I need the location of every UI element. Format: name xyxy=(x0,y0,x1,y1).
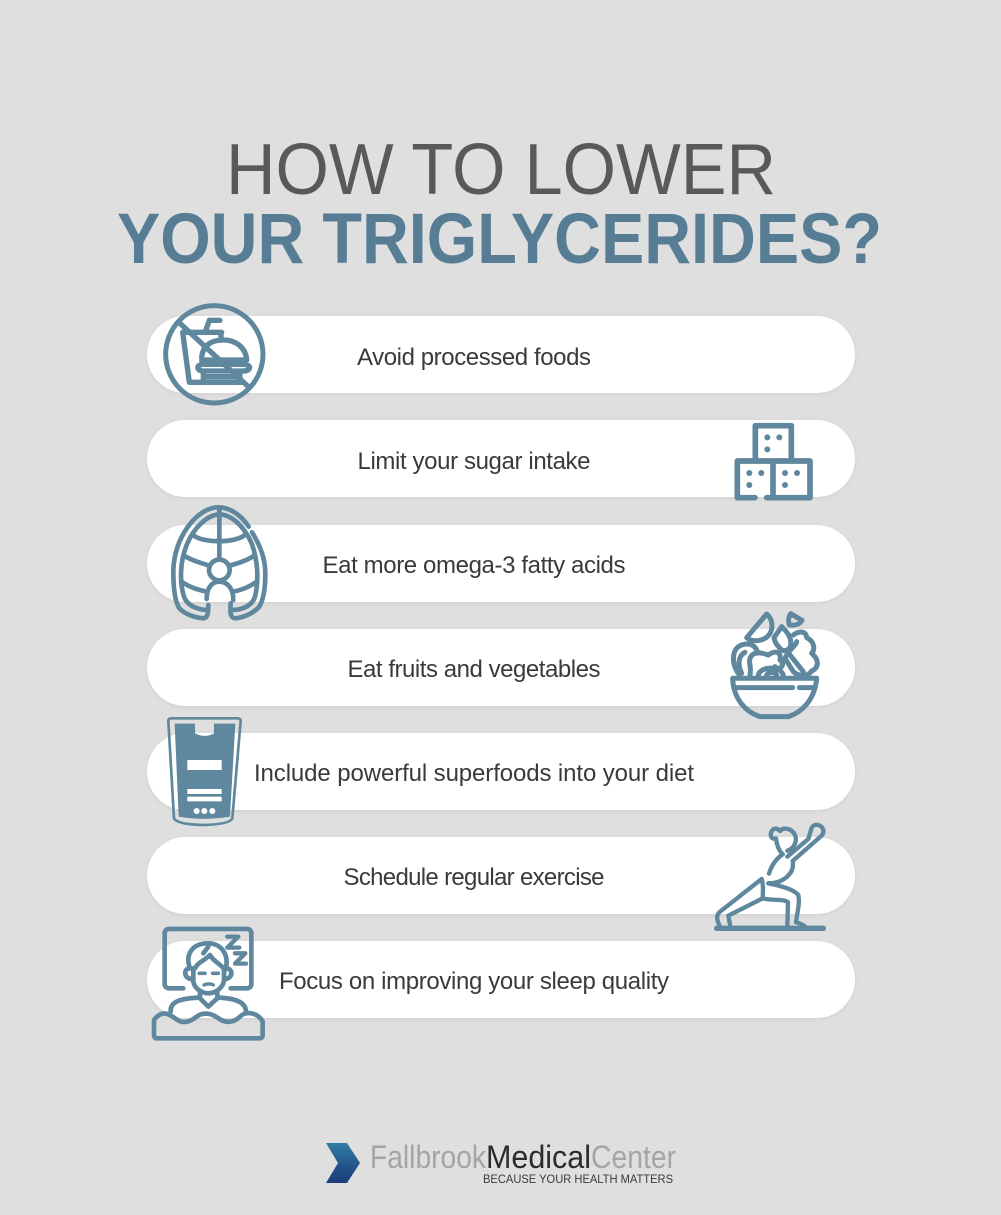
icon: salmon steak xyxy=(173,507,265,618)
icon: superfood pouch xyxy=(168,718,241,825)
panel: limit sugar xyxy=(147,420,855,497)
logo: Fallbrook Medical Center: Fallbrook xyxy=(370,1139,487,1175)
icon: logo chevron xyxy=(326,1143,360,1183)
panel: avoid processed foods: Avoid processed foods xyxy=(357,344,591,371)
panel: sleep xyxy=(147,941,855,1018)
logo: Fallbrook Medical Center: Center xyxy=(591,1139,676,1175)
logo: Fallbrook Medical Center: Medical xyxy=(486,1139,591,1175)
icon: sleeping person xyxy=(154,929,263,1038)
icon: exercise lunge pose xyxy=(717,825,823,928)
panel: exercise: Schedule regular exercise xyxy=(344,864,604,891)
logo: Fallbrook Medical Center xyxy=(326,1139,676,1186)
panel: sleep: Focus on improving your sleep quality xyxy=(279,968,669,995)
panel: fruits and vegetables: Eat fruits and vegetables xyxy=(348,656,600,683)
panel: superfoods: Include powerful superfoods into your diet xyxy=(254,760,694,787)
panel: exercise xyxy=(147,837,855,914)
panel: fruits and vegetables xyxy=(147,629,855,706)
title xyxy=(117,130,882,279)
title: HOW TO LOWER xyxy=(226,130,776,210)
logo: Fallbrook Medical Center: BECAUSE YOUR HEALTH MATTERS xyxy=(483,1172,673,1186)
icon: sugar cubes xyxy=(737,426,810,498)
icon: no fast food xyxy=(166,306,263,403)
panel: limit sugar: Limit your sugar intake xyxy=(358,448,590,475)
icon: salad bowl xyxy=(733,614,817,717)
panel: avoid processed foods xyxy=(147,316,855,393)
panel: superfoods xyxy=(147,733,855,810)
panel: omega-3 xyxy=(147,525,855,602)
panel: omega-3: Eat more omega-3 fatty acids xyxy=(322,552,626,579)
title: YOUR TRIGLYCERIDES? xyxy=(117,200,882,279)
